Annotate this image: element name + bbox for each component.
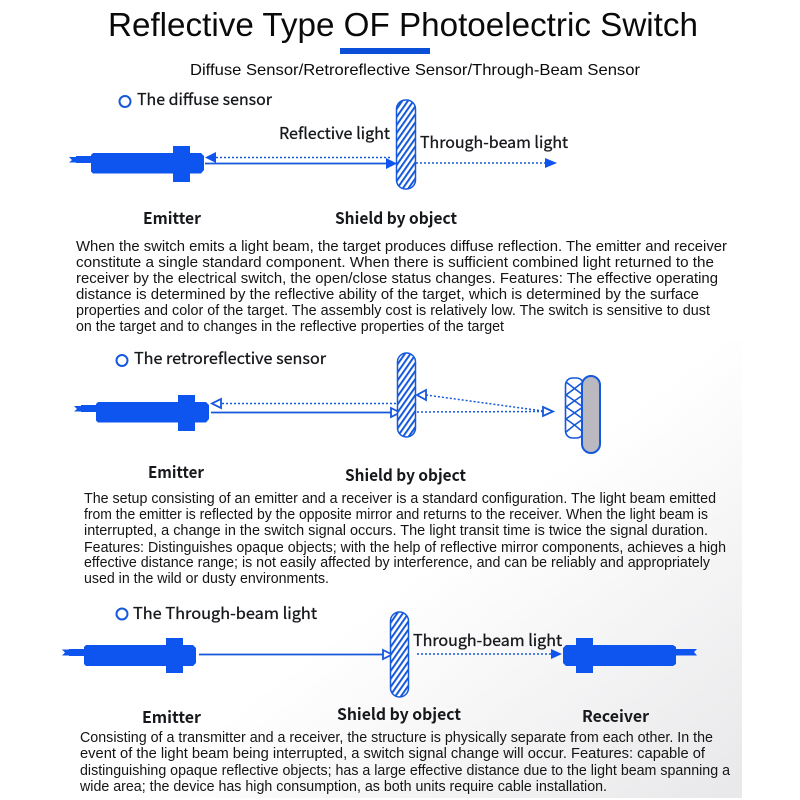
icon: emitter sensor (69, 146, 204, 182)
icon: shield object (398, 353, 416, 437)
text: retroreflective description: used in the wild or dusty environments. (84, 571, 329, 587)
beam: through-beam light (417, 649, 562, 659)
heading: through-beam light: The Through-beam light (133, 600, 317, 624)
text: through-beam description: wide area; the device has high consumption, as both units require cable installation. (79, 779, 607, 795)
text: through-beam description: Consisting of a transmitter and a receiver, the structure is physically separate from each other. In the (80, 730, 713, 746)
text: retroreflective description: The setup consisting of an emitter and a receiver is a standard configuration. The light beam emitted (84, 491, 716, 507)
label: emitter: Emitter (143, 205, 201, 229)
text: retroreflective description: interrupted, a change in the switch signal occurs. The light transit time is twice the signal duration. (84, 523, 708, 539)
label: shield by object: Shield by object (335, 205, 457, 229)
text: through-beam description: event of the light beam being interrupted, a switch signal change will occur. Features: capable of (80, 746, 705, 762)
text: diffuse description: When the switch emits a light beam, the target produces diffuse reflection. The emitter and receiver (76, 239, 727, 255)
label: shield by object: Shield by object (345, 462, 466, 486)
beam: emitted and reflected light (205, 152, 397, 169)
icon: emitter sensor (62, 638, 196, 673)
panel: through-beam sensor (62, 600, 730, 795)
text: diffuse description: on the target and to changes in the reflective properties of the target (76, 319, 504, 335)
icon: emitter sensor (74, 395, 209, 431)
beam: through-beam light (416, 158, 557, 168)
text: retroreflective description: from the emitter is reflected by the opposite mirror and returns to the receiver. When the light beam is (84, 507, 708, 523)
text: diffuse description: receiver by the electrical switch, the open/close status changes. Features: The effective operating (76, 271, 718, 287)
beam: emitted light (211, 408, 400, 417)
text: retroreflective description: effective distance range; is not easily affected by interference, and can be reliably and appropriately (84, 555, 711, 571)
text: diffuse description: constitute a single standard component. When there is sufficient combined light returned to the (76, 255, 714, 271)
title accent bar (340, 48, 430, 54)
text: through-beam description: distinguishing opaque reflective objects; has a large effective distance due to the light beam spanning a (80, 763, 730, 779)
icon: shield object (390, 612, 408, 697)
beam: returned light (212, 399, 396, 408)
icon: reflector mirror (566, 376, 600, 453)
heading: retroreflective sensor: The retroreflective sensor (134, 345, 327, 369)
label: reflective light: Reflective light (279, 120, 390, 144)
icon: shield object (396, 100, 416, 189)
text: through-beam description (79, 730, 730, 795)
title: Reflective Type OF Photoelectric Switch (108, 6, 698, 43)
text: diffuse description: properties and color of the target. The assembly cost is relatively low. The switch is sensitive to dust (76, 303, 710, 319)
label: through-beam light: Through-beam light (420, 129, 568, 153)
text: retroreflective description (84, 491, 726, 587)
label: emitter: Emitter (142, 704, 201, 728)
text: diffuse description: distance is determined by the reflective ability of the target, which is determined by the surface (76, 287, 699, 303)
text: diffuse description (76, 239, 727, 335)
label: receiver: Receiver (582, 703, 649, 727)
label: through-beam light: Through-beam light (413, 627, 562, 651)
beam: light to and from reflector (417, 390, 553, 416)
panel: retroreflective sensor (74, 345, 726, 587)
icon: receiver sensor (563, 638, 697, 673)
panel: diffuse sensor (69, 86, 727, 335)
beam: emitted light (199, 650, 392, 659)
text: retroreflective description: Features: Distinguishes opaque objects; with the help of reflective mirror components, achieves a high (84, 540, 726, 556)
subtitle: Diffuse Sensor/Retroreflective Sensor/Through-Beam Sensor (190, 62, 641, 79)
heading: diffuse sensor: The diffuse sensor (137, 86, 273, 110)
label: emitter: Emitter (148, 459, 204, 483)
label: shield by object: Shield by object (337, 701, 461, 725)
